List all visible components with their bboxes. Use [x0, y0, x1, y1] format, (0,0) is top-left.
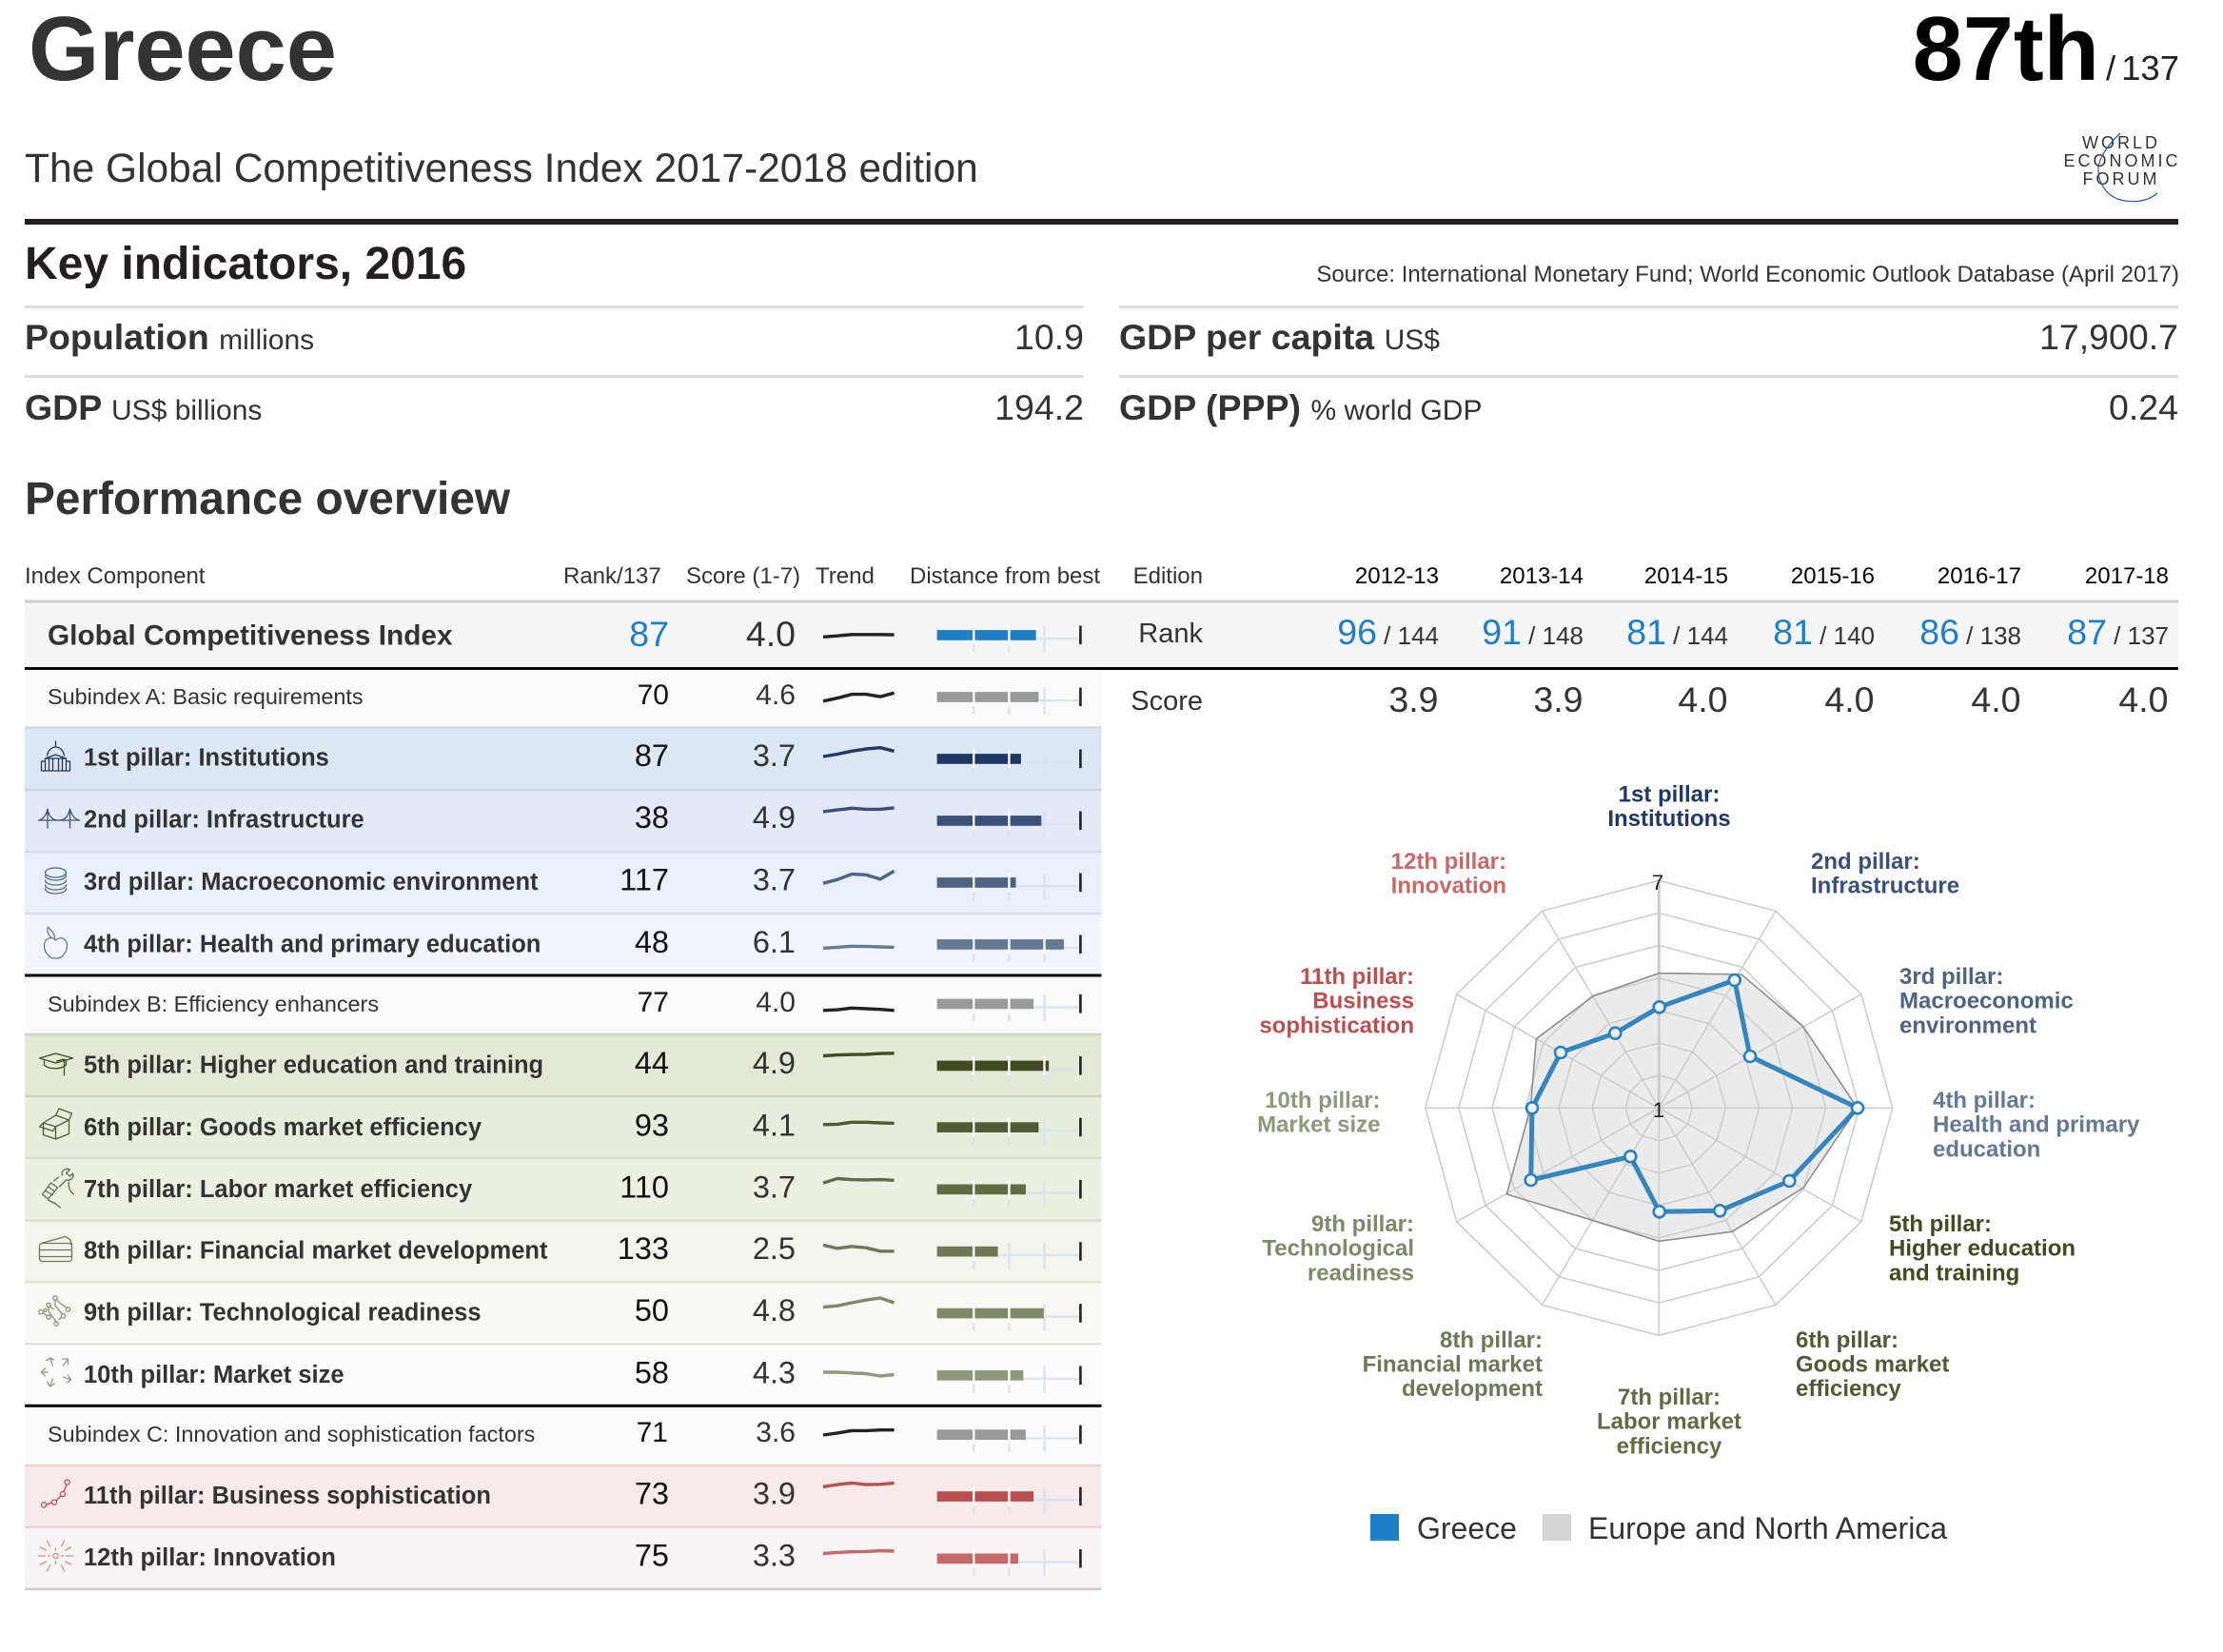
icon: rising line chart — [41, 1480, 69, 1507]
source note: Source: International Monetary Fund; World Economic Outlook Database (April 2017) — [1316, 262, 2179, 287]
trend — [823, 1298, 895, 1308]
score: 4.8 — [753, 1293, 796, 1328]
subtitle: The Global Competitiveness Index 2017-2018 edition — [25, 147, 978, 191]
radar label: 8th pillar: Financial market — [1363, 1351, 1543, 1378]
score: 4.0 — [746, 614, 796, 654]
legend — [1370, 1511, 1947, 1545]
trend — [823, 1430, 895, 1435]
heading: performance overview: Performance overview — [25, 474, 511, 524]
radar label: 9th pillar: 9th pillar: — [1311, 1211, 1414, 1237]
row: 4th pillar — [25, 914, 1102, 975]
score: 3.6 — [756, 1417, 796, 1448]
radar label: 4th pillar: 4th pillar: — [1933, 1088, 2036, 1113]
radar label: 11th pillar: 11th pillar: — [1300, 964, 1414, 990]
score: 3.7 — [753, 862, 796, 896]
distance bar — [937, 1118, 1080, 1145]
label: 10th pillar: Market size — [84, 1362, 344, 1388]
trend — [823, 1122, 895, 1125]
rank: 75 — [635, 1538, 669, 1572]
distance bar — [937, 626, 1080, 653]
trend — [823, 635, 895, 637]
value: population: 10.9 — [1014, 317, 1084, 357]
label: 1st pillar: Institutions — [84, 744, 329, 771]
radar label: 4th pillar: education — [1933, 1136, 2040, 1162]
row: 12th pillar — [25, 1527, 1102, 1589]
rank: 87 — [635, 738, 669, 773]
radar label: 12th pillar: 12th pillar: — [1391, 849, 1506, 875]
score: 4.9 — [753, 1046, 796, 1080]
logo: World Economic Forum: FORUM — [2082, 169, 2160, 188]
value: GDP: 194.2 — [994, 387, 1084, 427]
score history: 4.0 — [1971, 679, 2021, 719]
radar label: 6th pillar: Goods market — [1796, 1351, 1949, 1378]
radar label: 7th pillar: efficiency — [1617, 1433, 1722, 1459]
row: 2nd pillar — [25, 790, 1102, 852]
distance bar — [937, 1426, 1080, 1452]
rank: 50 — [635, 1293, 669, 1328]
header: editions: 2013-14 — [1500, 563, 1584, 589]
icon: wallet and cards — [40, 1237, 72, 1262]
trend — [823, 1178, 895, 1183]
icon: institution building — [42, 741, 70, 771]
rank: 77 — [638, 987, 669, 1018]
logo: World Economic Forum: ECONOMIC — [2063, 151, 2181, 170]
label: Subindex C: Innovation and sophistication factors — [48, 1422, 535, 1446]
radar label: 8th pillar: development — [1402, 1376, 1543, 1402]
radar label: 9th pillar: Technological — [1262, 1236, 1414, 1262]
table header: left — [25, 563, 1100, 589]
radar label: 6th pillar: efficiency — [1796, 1376, 1901, 1402]
header: editions: 2012-13 — [1355, 563, 1439, 589]
indicator: GDP PPP: GDP (PPP) % world GDP — [1119, 387, 1482, 427]
label: 4th pillar: Health and primary education — [84, 931, 541, 957]
rank history — [1138, 612, 2169, 652]
distance bar — [937, 811, 1080, 838]
radar label: 2nd pillar: Infrastructure — [1811, 874, 1959, 899]
score: 3.9 — [753, 1477, 796, 1511]
distance bar — [937, 687, 1080, 715]
row: 10th pillar — [25, 1344, 1102, 1406]
icon: tools in hand — [42, 1169, 74, 1208]
icon: coins — [46, 868, 67, 894]
label: 5th pillar: Higher education and training — [84, 1052, 543, 1079]
score history: 3.9 — [1533, 679, 1584, 719]
panel: key indicators — [25, 305, 2178, 427]
row: Global Competitiveness Index — [25, 602, 1101, 668]
icon: graduation cap — [40, 1053, 72, 1075]
score history — [1131, 679, 2168, 719]
trend — [823, 1008, 895, 1011]
trend — [823, 1551, 895, 1553]
rank history: Rank — [1138, 619, 1203, 649]
label: 7th pillar: Labor market efficiency — [84, 1176, 473, 1203]
table: edition history — [1101, 563, 2178, 719]
score history: 4.0 — [1678, 679, 1728, 719]
row: Subindex B — [25, 976, 1102, 1034]
score: 4.6 — [756, 679, 796, 711]
regional average polygon: Europe and North America — [1506, 974, 1858, 1241]
trend — [823, 1483, 895, 1486]
header: editions: 2016-17 — [1938, 563, 2021, 589]
row: 9th pillar — [25, 1282, 1102, 1344]
radar label: 5th pillar: 5th pillar: — [1889, 1211, 1992, 1237]
radar label: 1st pillar: Institutions — [1607, 806, 1731, 832]
legend: Europe and North America — [1588, 1511, 1947, 1545]
header: editions — [1133, 563, 2169, 589]
distance bar — [937, 750, 1080, 777]
row: 6th pillar — [25, 1096, 1102, 1158]
label: Global Competitiveness Index — [48, 620, 453, 651]
country polygon: Greece — [1531, 980, 1858, 1211]
radar label: 3rd pillar: Macroeconomic — [1899, 989, 2074, 1014]
indicator: population: Population millions — [25, 317, 314, 357]
icon: bridge — [38, 809, 80, 828]
score: 4.1 — [753, 1108, 796, 1142]
radar label: 12th pillar: Innovation — [1391, 874, 1506, 899]
rank history: 96 / 144 — [1337, 612, 1439, 652]
label: 11th pillar: Business sophistication — [84, 1483, 491, 1509]
icon: apple — [44, 927, 67, 958]
row: 11th pillar — [25, 1465, 1102, 1527]
table header: left: Distance from best — [910, 563, 1100, 589]
value: GDP per capita: 17,900.7 — [2039, 317, 2178, 357]
table header: left: Index Component — [25, 563, 206, 589]
distance bar — [937, 934, 1080, 962]
distance bar — [937, 1056, 1080, 1083]
radar label: 8th pillar: 8th pillar: — [1440, 1328, 1543, 1353]
heading: key indicators: Key indicators, 2016 — [25, 239, 466, 289]
logo: World Economic Forum — [2063, 133, 2181, 202]
table header: left: Rank/137 — [563, 563, 661, 589]
table header: left: Trend — [816, 563, 875, 589]
radar label: 3rd pillar: environment — [1899, 1013, 2036, 1038]
label: 3rd pillar: Macroeconomic environment — [84, 869, 539, 895]
rank history: 91 / 148 — [1482, 612, 1584, 652]
radar grid — [1426, 880, 1893, 1335]
distance bar — [937, 1242, 1080, 1268]
row: 5th pillar — [25, 1034, 1102, 1096]
score: 4.3 — [753, 1355, 796, 1389]
radar label: 6th pillar: 6th pillar: — [1796, 1328, 1898, 1353]
header: editions: 2015-16 — [1791, 563, 1875, 589]
radar label: 5th pillar: and training — [1889, 1260, 2019, 1286]
rank: 133 — [618, 1231, 669, 1266]
row: Subindex A — [25, 670, 1102, 727]
distance bar — [937, 1487, 1080, 1514]
row: Subindex C — [25, 1406, 1102, 1465]
overall rank: /137 — [2106, 49, 2179, 88]
icon: outward arrows — [42, 1358, 70, 1386]
trend — [823, 693, 895, 701]
radar label: 10th pillar: Market size — [1257, 1112, 1380, 1138]
rank: 48 — [635, 925, 669, 959]
label: Subindex A: Basic requirements — [48, 684, 364, 709]
radar label: 4th pillar: Health and primary — [1933, 1112, 2140, 1138]
distance bar — [937, 994, 1080, 1021]
distance bar — [937, 1180, 1080, 1207]
icon: circuit nodes — [39, 1296, 70, 1326]
indicator: GDP per capita: GDP per capita US$ — [1119, 317, 1440, 357]
distance bar — [937, 1549, 1080, 1576]
row: 8th pillar — [25, 1220, 1102, 1282]
radar label: 10th pillar: 10th pillar: — [1265, 1088, 1380, 1113]
rank history: 81 / 140 — [1773, 612, 1875, 652]
rank: 38 — [635, 800, 669, 835]
rank: 110 — [620, 1170, 669, 1204]
value: GDP PPP: 0.24 — [2109, 387, 2178, 427]
label: 2nd pillar: Infrastructure — [84, 807, 364, 834]
distance bar — [937, 874, 1080, 900]
scale label 1: 1 — [1653, 1098, 1664, 1122]
title: country name: Greece — [29, 0, 337, 100]
overall rank: 87th — [1913, 0, 2099, 100]
scale label 7: 7 — [1652, 871, 1663, 895]
trend — [823, 871, 895, 883]
score: 4.9 — [753, 800, 796, 835]
rank: 71 — [637, 1417, 668, 1448]
rank: 117 — [620, 862, 669, 896]
indicator: GDP: GDP US$ billions — [25, 387, 262, 427]
label: 8th pillar: Financial market development — [84, 1237, 548, 1264]
icon: open box — [40, 1109, 72, 1139]
trend — [823, 808, 895, 812]
score history: 3.9 — [1388, 679, 1439, 719]
label: 12th pillar: Innovation — [84, 1544, 336, 1571]
label: Subindex B: Efficiency enhancers — [48, 992, 379, 1016]
table header: left: Score (1-7) — [686, 563, 800, 589]
score: 3.3 — [753, 1538, 796, 1572]
radar label: 9th pillar: readiness — [1308, 1260, 1414, 1286]
label: 6th pillar: Goods market efficiency — [84, 1114, 482, 1141]
radar chart — [1426, 871, 1893, 1335]
rank history: 87 / 137 — [2067, 612, 2169, 652]
rank: 93 — [635, 1108, 669, 1142]
header: editions: Edition — [1133, 563, 1203, 589]
country markers — [1525, 974, 1863, 1217]
trend — [823, 1245, 895, 1251]
radar label: 7th pillar: 7th pillar: — [1618, 1385, 1721, 1410]
rank: 87 — [629, 614, 669, 654]
row: 7th pillar — [25, 1158, 1102, 1220]
rank history: 81 / 144 — [1626, 612, 1728, 652]
radar label: 1st pillar: 1st pillar: — [1619, 782, 1720, 807]
score history: 4.0 — [2118, 679, 2168, 719]
distance bar — [937, 1304, 1080, 1330]
score history: Score — [1131, 686, 1203, 717]
distance bar — [937, 1366, 1080, 1393]
score: 3.7 — [753, 1170, 796, 1204]
legend: Greece — [1417, 1511, 1517, 1545]
rank: 58 — [635, 1355, 669, 1389]
row: 3rd pillar — [25, 852, 1102, 914]
radar label: 11th pillar: Business — [1312, 989, 1414, 1014]
rank history: 86 / 138 — [1919, 612, 2021, 652]
radar label: 2nd pillar: 2nd pillar: — [1811, 849, 1920, 875]
radar label: 5th pillar: Higher education — [1889, 1236, 2075, 1262]
radar label: 11th pillar: sophistication — [1259, 1013, 1414, 1038]
score history: 4.0 — [1824, 679, 1875, 719]
score: 6.1 — [753, 925, 796, 959]
score: 2.5 — [753, 1231, 796, 1266]
trend — [823, 1372, 895, 1376]
logo: World Economic Forum: WORLD — [2082, 133, 2160, 152]
icon: spark burst — [38, 1541, 72, 1571]
radar label: 7th pillar: Labor market — [1597, 1409, 1741, 1435]
score: 3.7 — [753, 738, 796, 773]
rank: 70 — [638, 679, 669, 711]
rank: 44 — [635, 1046, 669, 1080]
label: 9th pillar: Technological readiness — [84, 1300, 482, 1327]
score: 4.0 — [756, 987, 796, 1018]
radar label: 3rd pillar: 3rd pillar: — [1899, 964, 2003, 990]
trend — [823, 748, 895, 757]
header: editions: 2017-18 — [2085, 563, 2169, 589]
trend — [823, 1053, 895, 1056]
trend — [823, 946, 895, 948]
header: editions: 2014-15 — [1644, 563, 1728, 589]
row: 1st pillar — [25, 728, 1102, 790]
rank: 73 — [635, 1477, 669, 1511]
